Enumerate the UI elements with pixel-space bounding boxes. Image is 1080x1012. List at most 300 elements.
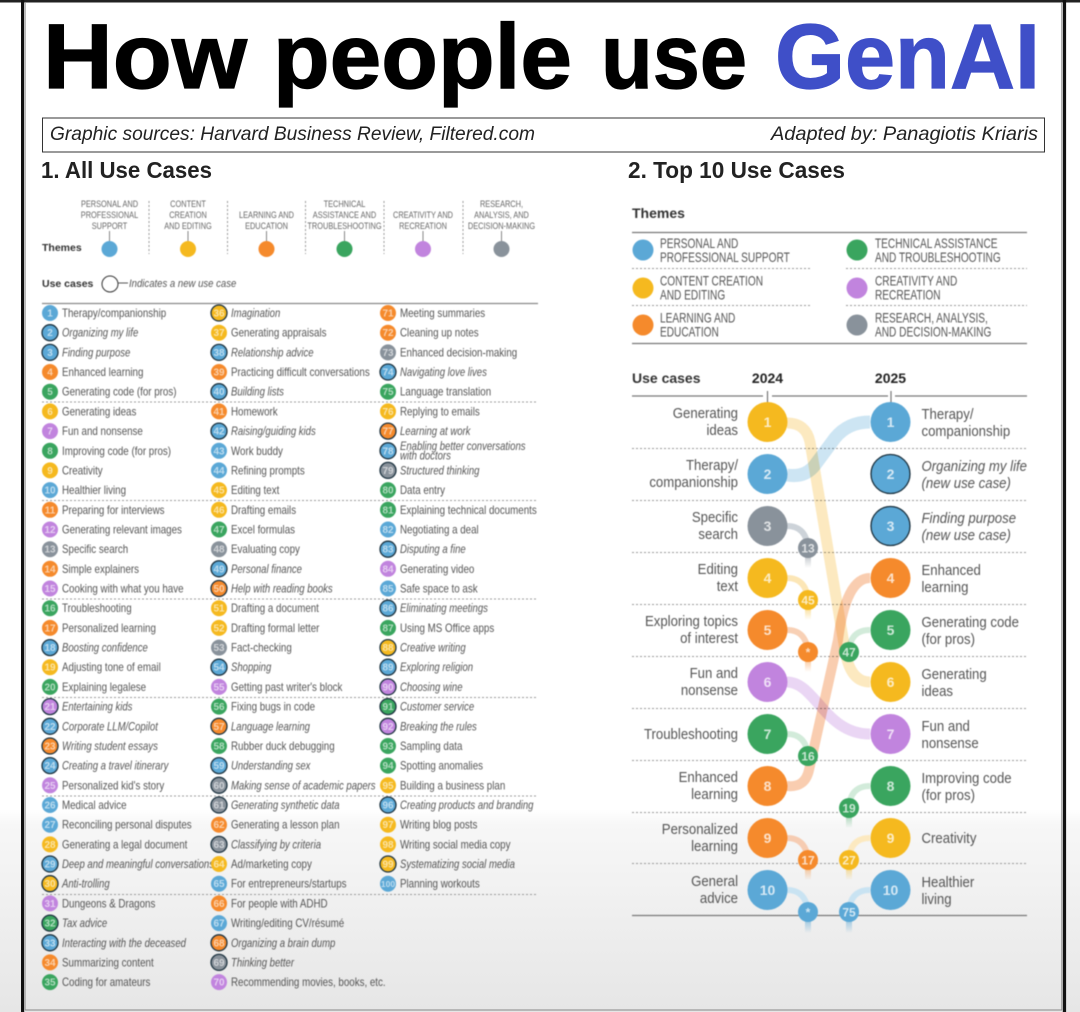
case 30 [42,876,110,892]
case 34: Summarizing content [62,957,154,970]
2024 rank 5: 5 [764,622,772,638]
2024 rank 1: 1 [764,414,772,430]
case 74: 74 [382,368,394,378]
case 57 [211,718,310,734]
case 91: Customer service [400,701,474,714]
case 2 [42,325,138,341]
use cases key: Use cases [42,278,94,290]
case 7: Fun and nonsense [62,425,143,438]
case 91 [380,699,474,715]
2025 rank 5: Generating code [922,613,1019,630]
case 38: Relationship advice [231,347,314,360]
column 3: use cases 71 to 100 [380,305,537,892]
2025 rank 4: 4 [887,570,895,586]
case 8: 8 [47,446,53,457]
case 14 [42,561,139,577]
2024 rank 5: of interest [680,629,738,646]
2024 rank 5: Exploring topics [645,612,738,629]
case 49: Personal finance [231,563,302,576]
case 70: 70 [213,978,225,989]
chart header: 2024 [752,370,783,386]
case 78: Enabling better conversations [400,440,526,453]
panel: all use cases [42,198,538,990]
case 69: Thinking better [231,957,294,970]
legend: learning [632,310,736,340]
case 84 [380,561,474,577]
title: use [601,6,747,108]
column 1: use cases 1 to 35 [42,305,215,990]
case 8: Improving code (for pros) [62,445,171,458]
case 59 [211,758,311,774]
case 78: 78 [382,446,394,457]
2025 rank 10 [870,870,975,910]
themes legend row: PROFESSIONAL [81,209,138,220]
case 39: Practicing difficult conversations [231,366,370,379]
2024 rank 1 [673,402,788,442]
2024 rank 5 [645,610,788,650]
case 33: Interacting with the deceased [62,937,187,950]
case 81: 81 [382,505,394,516]
case 22 [42,718,159,734]
2025 rank 3: Finding purpose [922,509,1016,526]
2024 rank 10: 10 [760,882,775,898]
case 6: 6 [47,407,53,418]
case 9 [42,462,103,478]
case 77: 77 [382,427,394,438]
case 96: 96 [382,800,394,812]
case 51 [211,600,319,616]
case 48: Evaluating copy [231,544,301,556]
marker 16 [798,746,818,766]
2025 rank 5: (for pros) [922,630,975,647]
case 92: 92 [382,722,394,733]
case 79: Structured thinking [400,465,480,478]
case 62: Generating a lesson plan [231,819,340,832]
case 20: Explaining legalese [62,681,146,694]
case 29: Deep and meaningful conversations [62,858,215,871]
case 46 [211,502,296,518]
legend: content creation: CONTENT CREATION [660,273,763,289]
column 2: use cases 36 to 70 [211,305,386,990]
legend: technical: TECHNICAL ASSISTANCE [875,236,998,251]
case 50: 50 [213,584,225,595]
case 20 [42,679,146,695]
case 73 [380,344,517,360]
case 50: Help with reading books [231,583,333,596]
case 84: Generating video [400,563,474,576]
case 59: 59 [213,761,225,772]
case 60: 60 [213,781,225,792]
case 86: Eliminating meetings [400,602,489,615]
chart: top 10 slope chart [632,370,1027,933]
2025 rank 2: (new use case) [922,474,1011,491]
2024 rank 10 [691,870,788,910]
case 56 [211,699,315,715]
legend: research [846,310,991,340]
case 43: Work buddy [231,445,284,458]
case 48 [211,541,301,557]
case 16: Troubleshooting [62,603,132,615]
case 17: Personalized learning [62,622,156,635]
case 43 [211,443,284,459]
case 85: 85 [382,584,394,595]
case 57: 57 [213,722,225,733]
2025 rank 7 [870,714,979,754]
2025 rank 1 [870,402,1010,442]
case 62: 62 [213,820,225,831]
marker star orange [798,642,818,662]
case 70: Recommending movies, books, etc. [231,976,386,989]
case 12 [42,522,182,538]
case 97: 97 [382,820,394,831]
marker 19 [839,798,859,818]
case 59: Understanding sex [231,760,311,773]
case 27: 27 [44,820,56,831]
case 37 [211,325,326,341]
case 58 [211,738,335,754]
2025 rank 6: Generating [922,665,987,682]
case 65: 65 [213,879,225,890]
case 54: 54 [213,663,225,674]
2025 rank 8: 8 [887,778,895,794]
2025 rank 4: Enhanced [922,561,981,578]
case 31: Dungeons & Dragons [62,898,155,911]
case 74: Navigating love lives [400,366,487,379]
2024 rank 4 [698,558,788,598]
case 69: 69 [213,958,225,969]
2025 rank 4 [870,558,981,598]
case 14: 14 [44,564,56,575]
case 75: 75 [382,387,394,398]
case 90 [380,679,463,695]
marker 17 [798,850,818,870]
themes legend row: TECHNICAL [324,198,366,209]
case 17: 17 [44,623,56,634]
case 41: 41 [213,407,225,418]
case 68: Organizing a brain dump [231,937,335,950]
2025 rank 5: 5 [887,622,895,638]
case 37: Generating appraisals [231,327,326,340]
source box: Adapted by: Panagiotis Kriaris [770,123,1038,145]
title: GenAI [775,6,1040,108]
case 33: 33 [44,938,56,949]
2024 rank 6: 6 [764,674,772,690]
case 55: 55 [213,682,225,693]
2025 rank 1: 1 [887,414,895,430]
2025 rank 4: learning [922,578,968,595]
case 60: Making sense of academic papers [231,780,376,793]
case 4 [42,364,143,380]
case 29: 29 [44,860,56,870]
case 31 [42,895,155,911]
2024 rank 7: 7 [764,726,772,742]
case 51: 51 [213,604,225,615]
case 4: Enhanced learning [62,366,143,379]
case 72 [380,325,479,341]
case 3: Finding purpose [62,347,130,360]
source box [42,118,1044,152]
case 26: Medical advice [62,799,127,812]
themes legend row: EDUCATION [245,220,288,231]
case 71: Meeting summaries [400,307,485,320]
case 23: Writing student essays [62,740,158,753]
2025 rank 9: 9 [887,830,895,846]
case 15 [42,580,184,596]
case 3: 3 [47,348,53,359]
case 73: Enhanced decision-making [400,347,517,360]
case 27: Reconciling personal disputes [62,819,192,832]
case 19: 19 [44,663,56,674]
themes legend row: SUPPORT [92,220,128,231]
case 66: 66 [213,899,225,910]
case 81: Explaining technical documents [400,504,537,517]
case 35 [42,974,150,990]
case 77: Learning at work [400,425,471,438]
case 10: Healthier living [62,484,126,497]
case 77 [380,423,471,439]
case 80: 80 [382,486,394,497]
case 22: Corporate LLM/Copilot [62,721,159,734]
legend: research: AND DECISION-MAKING [875,324,991,340]
2025 ranks [870,402,1027,910]
legend: creativity: RECREATION [875,287,941,303]
heading: all use cases: 1. All Use Cases [41,157,212,183]
case 18 [42,640,148,656]
case 46: 46 [213,505,225,516]
legend: technical [846,236,1001,265]
marker star blue: * [806,906,811,920]
2025 rank 6: 6 [887,674,895,690]
case 90: 90 [382,682,394,693]
case 58: 58 [213,742,225,752]
case 40: 40 [213,387,225,398]
legend: personal support: PERSONAL AND [660,236,739,251]
2025 rank 8: (for pros) [922,786,975,803]
case 79: 79 [382,466,394,477]
2024 rank 8: learning [691,785,738,802]
case 49 [211,561,302,577]
2025 rank 2: Organizing my life [922,457,1027,474]
case 85: Safe space to ask [400,583,478,596]
case 47 [211,522,295,538]
marker 13 [798,538,818,558]
case 40 [211,384,285,400]
2024 rank 7 [644,714,788,754]
case 63 [211,836,321,852]
case 68: 68 [213,938,225,949]
case 72: 72 [382,328,394,339]
2024 rank 1: Generating [673,404,738,421]
case 12: Generating relevant images [62,524,182,537]
2025 rank 10: living [922,890,952,907]
case 88: Creative writing [400,642,466,655]
case 54 [211,659,271,675]
chart header [632,370,1027,403]
case 5 [42,384,176,400]
marker 27: 27 [842,854,856,868]
case 13: 13 [44,545,56,556]
case 13: Specific search [62,544,128,556]
2024 rank 2: companionship [649,473,738,490]
case 95: Building a business plan [400,780,505,793]
case 44: Refining prompts [231,465,305,478]
case 38: 38 [213,348,225,359]
themes legend row: AND EDITING [164,220,212,231]
case 5: 5 [47,387,53,398]
case 67: Writing/editing CV/résumé [231,917,344,930]
2025 rank 5 [870,610,1019,650]
case 10: 10 [44,486,56,497]
2025 rank 8: Improving code [922,769,1012,786]
use cases key: Indicates a new use case [129,278,237,290]
case 88: 88 [382,643,394,654]
2024 rank 1: ideas [706,421,738,438]
case 93 [380,738,462,754]
themes legend row: CREATIVITY AND [393,209,453,220]
title: How [43,6,247,108]
2024 rank 4: Editing [698,560,738,577]
case 25: Personalized kid's story [62,780,165,793]
themes legend row: PERSONAL AND [81,198,138,209]
case 75: Language translation [400,386,491,399]
marker 16: 16 [801,750,815,764]
2025 rank 10: 10 [883,882,898,898]
case 66: For people with ADHD [231,898,328,911]
case 53: Fact-checking [231,642,292,655]
case 53: 53 [213,643,225,654]
case 42: Raising/guiding kids [231,425,316,438]
case 85 [380,580,478,596]
themes legend row: RECREATION [399,220,447,231]
case 53 [211,640,292,656]
case 35: Coding for amateurs [62,976,150,989]
2025 rank 6 [870,662,987,702]
case 28 [42,836,187,852]
chart header: Use cases [632,370,701,386]
2024 rank 2: Therapy/ [686,456,738,473]
case 63: 63 [213,840,225,851]
case 47: 47 [213,525,225,536]
case 2: Organizing my life [62,327,138,340]
case 62 [211,817,340,833]
legend: technical: AND TROUBLESHOOTING [875,250,1001,265]
2024 rank 9: learning [691,837,738,854]
case 24: Creating a travel itinerary [62,760,169,773]
case 39: 39 [213,368,225,378]
case 94: 94 [382,761,394,772]
legend: research: RESEARCH, ANALYSIS, [875,310,988,326]
2025 rank 3 [871,506,1016,546]
case 65: For entrepreneurs/startups [231,878,347,891]
2025 rank 7: Fun and [922,717,970,734]
themes legend row: RESEARCH, [480,198,523,209]
case 11: Preparing for interviews [62,504,165,517]
case 88 [380,640,466,656]
case 8 [42,443,171,459]
case 31: 31 [44,899,56,910]
case 24 [42,758,169,774]
2025 rank 3: (new use case) [922,526,1011,543]
2024 rank 8 [679,766,788,806]
case 83: 83 [382,545,394,556]
case 99 [380,856,515,872]
case 25 [42,777,165,793]
2024 ranks [644,402,788,910]
case 34: 34 [44,958,56,969]
case 9: Creativity [62,465,103,478]
case 15: 15 [44,584,56,595]
case 56: 56 [213,702,225,713]
legend: learning: EDUCATION [660,324,719,340]
2024 rank 3: 3 [764,518,772,534]
2024 rank 8: 8 [764,778,772,794]
case 11 [42,502,165,518]
themes legend row [42,198,535,257]
case 23 [42,738,158,754]
2024 rank 3: search [698,525,738,542]
case 64: 64 [213,860,225,870]
case 71: 71 [382,308,394,320]
case 95 [380,777,505,793]
case 71 [380,305,485,321]
marker 17: 17 [801,854,815,868]
themes legend row: DECISION-MAKING [468,220,535,231]
case 51: Drafting a document [231,603,319,615]
case 1 [42,305,166,321]
case 66 [211,895,328,911]
2025 rank 7: nonsense [922,734,979,751]
themes legend row: ASSISTANCE AND [313,209,376,220]
case 10 [42,482,126,498]
legend: creativity [846,273,958,303]
case 72: Cleaning up notes [400,327,479,340]
case 91: 91 [382,702,394,713]
case 1: Therapy/companionship [62,307,166,320]
legend: learning: LEARNING AND [660,310,736,326]
heading: top 10 use cases: 2. Top 10 Use Cases [628,157,845,183]
case 30: 30 [44,879,56,890]
legend: creativity: CREATIVITY AND [875,273,958,289]
2024 rank 9: Personalized [662,820,738,837]
case 55 [211,679,343,695]
marker 47: 47 [842,646,856,660]
case 79 [380,462,480,478]
2024 rank 7: Troubleshooting [644,725,738,742]
case 36 [211,305,280,321]
case 41 [211,403,278,419]
panel: top 10 themes legend [632,205,1027,344]
case 80 [380,482,446,498]
legend: content creation [632,273,763,303]
2025 rank 9: Creativity [922,829,977,846]
case 52: Drafting formal letter [231,622,320,635]
case 73: 73 [382,348,394,359]
use cases key [42,276,237,292]
case 84: 84 [382,564,394,575]
case 36: 36 [213,308,225,320]
themes legend row: CREATION [169,209,207,220]
case 52 [211,620,320,636]
case 100: Planning workouts [400,878,480,891]
case 82 [380,522,479,538]
case 94: Spotting anomalies [400,760,483,773]
2024 rank 2 [649,454,788,494]
themes legend row: ANALYSIS, AND [474,209,529,220]
case 19 [42,659,161,675]
2024 rank 4: 4 [764,570,772,586]
2024 rank 9 [662,818,788,858]
case 89: Exploring religion [400,661,473,674]
